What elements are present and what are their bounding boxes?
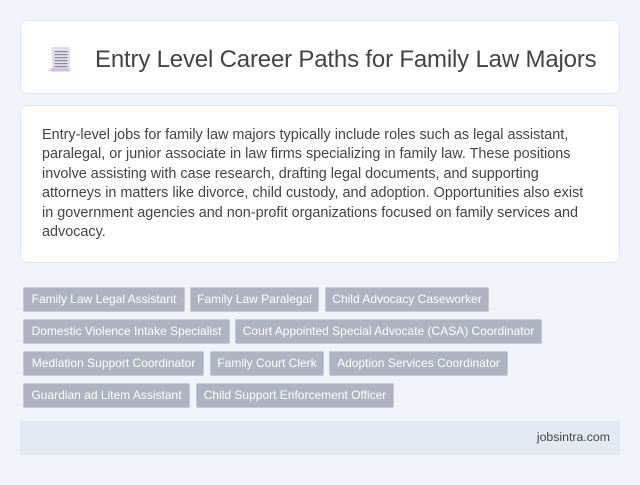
tag — [325, 287, 489, 312]
tag — [190, 287, 319, 312]
tag: Family Court Clerk — [217, 356, 317, 370]
icon: document scroll — [50, 47, 70, 72]
tag: Family Law Paralegal — [197, 292, 312, 306]
description text: paralegal, or junior associate in law firms specializing in family law. These positions — [42, 146, 570, 162]
description text — [42, 127, 584, 240]
header panel — [20, 20, 620, 94]
footer source text: jobsintra.com — [537, 430, 610, 444]
title: Entry Level Career Paths for Family Law Majors — [95, 46, 596, 73]
tag: Domestic Violence Intake Specialist — [32, 324, 221, 338]
tag: Adoption Services Coordinator — [337, 356, 500, 370]
description text: advocacy. — [42, 224, 106, 240]
description panel — [20, 105, 620, 263]
tag — [23, 319, 230, 344]
tag: Court Appointed Special Advocate (CASA) Coordinator — [243, 324, 534, 338]
tag — [329, 351, 508, 376]
tag: Family Law Legal Assistant — [32, 292, 176, 306]
description text: involve assisting with case research, drafting legal documents, and supporting — [42, 166, 539, 182]
tag — [196, 383, 394, 408]
footer bar — [20, 421, 620, 455]
tag — [23, 351, 204, 376]
tag — [210, 351, 324, 376]
description text: attorneys in matters like divorce, child custody, and adoption. Opportunities also exist — [42, 185, 583, 201]
tag: Child Support Enforcement Officer — [204, 388, 386, 402]
tag — [23, 383, 190, 408]
career tags — [23, 287, 542, 408]
tag: Guardian ad Litem Assistant — [31, 388, 182, 402]
tag — [23, 287, 185, 312]
description text: Entry-level jobs for family law majors typically include roles such as legal assistant, — [42, 127, 568, 143]
tag: Child Advocacy Caseworker — [332, 292, 482, 306]
tag — [235, 319, 542, 344]
description text: in government agencies and non-profit organizations focused on family services and — [42, 205, 578, 221]
tag: Mediation Support Coordinator — [32, 356, 195, 370]
